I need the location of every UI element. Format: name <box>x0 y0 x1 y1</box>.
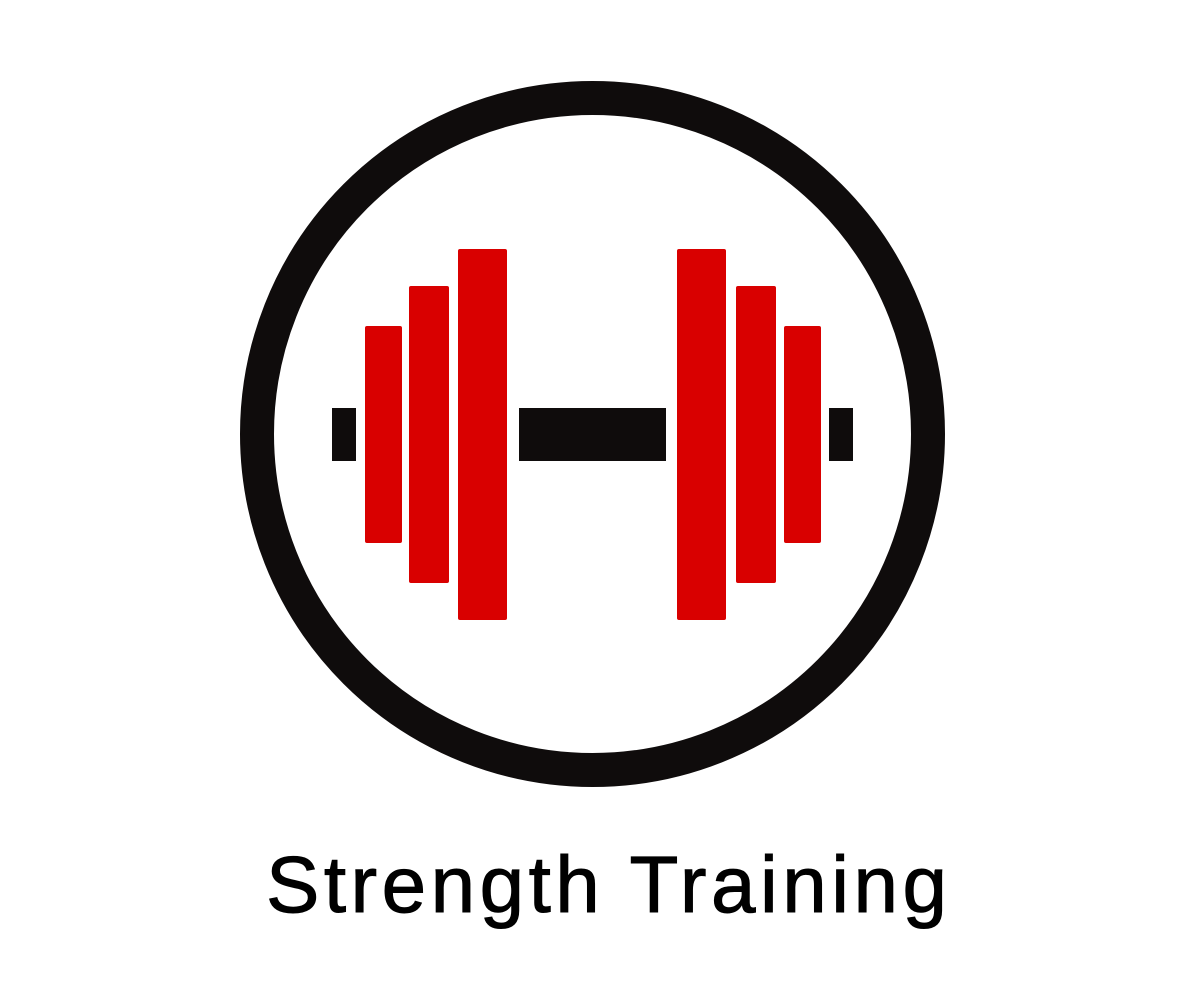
title: Strength Training <box>266 840 947 929</box>
icon: strength training dumbbell in circle <box>257 98 928 770</box>
ring <box>257 98 928 770</box>
dumbbell <box>332 249 853 620</box>
